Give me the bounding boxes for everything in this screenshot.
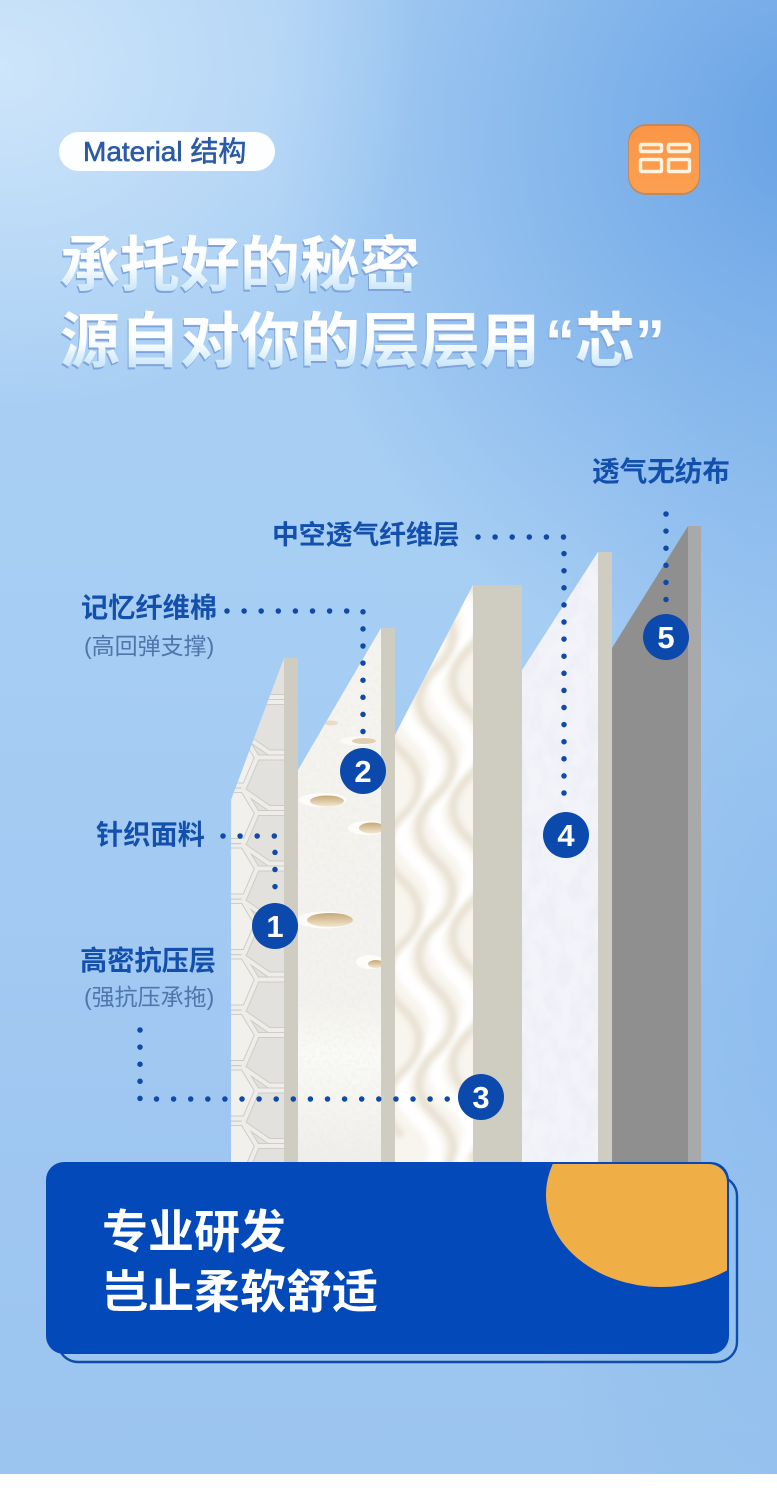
label: 记忆纤维棉: 记忆纤维棉 <box>81 592 217 623</box>
card heading: 专业研发 <box>102 1206 286 1258</box>
layer 1: hexagon knit fabric <box>231 658 298 1163</box>
mattress layers illustration <box>231 526 701 1184</box>
marker 4 <box>543 812 589 858</box>
card offset outline <box>58 1176 737 1362</box>
marker 5: 5 <box>657 620 675 655</box>
bottom card <box>46 1162 738 1364</box>
layer 3: wavy foam <box>395 585 522 1162</box>
pill label: Material 结构 <box>59 132 275 171</box>
layer 2: perforated memory foam <box>297 628 395 1163</box>
leader line 1 <box>223 836 275 890</box>
label: 透气无纺布: 透气无纺布 <box>592 456 730 487</box>
orange accent shape <box>546 1164 727 1287</box>
icon: orange layers badge <box>628 124 700 195</box>
title: 源自对你的层层用“芯” <box>60 308 665 375</box>
label: 中空透气纤维层: 中空透气纤维层 <box>272 520 460 550</box>
marker 3: 3 <box>472 1080 490 1115</box>
layer 5: grey non-woven <box>612 526 701 1163</box>
pill label: Material 结构: Material 结构 <box>83 136 246 167</box>
card heading: 岂止柔软舒适 <box>102 1266 378 1318</box>
label: 高密抗压层 <box>80 945 216 1010</box>
label: 高密抗压层: (强抗压承拖) <box>84 984 214 1010</box>
leader line 4 <box>478 537 564 806</box>
title <box>60 232 665 375</box>
label: 针织面料: 针织面料 <box>96 819 205 850</box>
card body <box>46 1162 729 1354</box>
marker 1: 1 <box>266 909 284 944</box>
marker 2: 2 <box>354 754 372 789</box>
title: 承托好的秘密 <box>60 232 420 299</box>
marker 3 <box>458 1074 504 1120</box>
label: 记忆纤维棉: (高回弹支撑) <box>84 633 214 659</box>
marker 5 <box>643 614 689 660</box>
marker 4: 4 <box>557 818 575 853</box>
layer 4: white air fibre <box>522 552 612 1163</box>
marker 1 <box>252 903 298 949</box>
marker 2 <box>340 748 386 794</box>
leader line 5 <box>663 514 669 602</box>
card heading <box>102 1206 378 1318</box>
label: 记忆纤维棉 <box>81 592 217 659</box>
leader line 3 <box>140 1030 463 1099</box>
leader line 2 <box>227 611 363 732</box>
label: 高密抗压层: 高密抗压层 <box>80 945 216 976</box>
